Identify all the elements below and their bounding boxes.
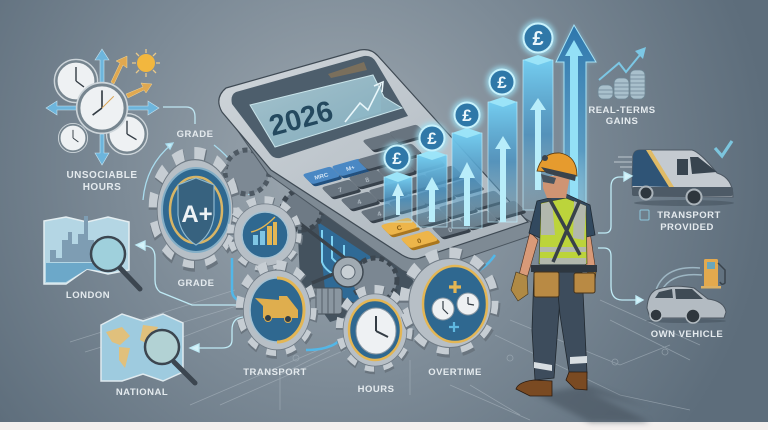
right leg — [556, 272, 587, 373]
label: real-terms gains: GAINS — [606, 116, 638, 127]
bar 4 with pound coin — [486, 66, 518, 222]
arms — [519, 232, 596, 278]
connector to london — [136, 241, 240, 305]
clock bottom left — [58, 123, 88, 153]
bar 3 with pound coin — [451, 99, 483, 228]
pulley — [333, 257, 363, 287]
gear: overtime — [406, 254, 493, 350]
van — [614, 150, 734, 206]
label: transport: TRANSPORT — [243, 367, 307, 378]
connector to van — [598, 172, 632, 233]
safety glasses — [541, 174, 556, 184]
calculator side — [219, 80, 531, 274]
map: national — [101, 314, 195, 383]
bar 2 with pound coin: £ — [427, 129, 437, 148]
connector arcs around grade gear — [143, 143, 249, 200]
key labels: 8 — [365, 177, 371, 184]
bar 4 with pound coin: £ — [497, 73, 507, 92]
clocks icon: unsociable hours — [46, 49, 160, 165]
key labels: 0 — [448, 227, 454, 234]
key labels: 4 — [357, 199, 363, 206]
reflective bands — [534, 356, 587, 371]
circuit lines — [70, 290, 700, 420]
label: transport provided: TRANSPORT — [657, 210, 721, 221]
check mark — [715, 141, 732, 156]
sun — [132, 49, 160, 77]
fuel pump — [656, 259, 725, 290]
gear: grade — [154, 155, 235, 263]
label: overtime: OVERTIME — [428, 367, 482, 378]
label: upper grade: GRADE — [177, 129, 213, 140]
label: own vehicle: OWN VEHICLE — [651, 329, 723, 340]
label: lower grade: GRADE — [178, 278, 214, 289]
vest reflective stripes — [540, 201, 586, 264]
label: real-terms gains: REAL-TERMS — [588, 105, 656, 116]
glowing pipes — [232, 255, 495, 350]
label: hours: HOURS — [358, 384, 394, 395]
key labels: M+ — [346, 165, 356, 173]
display year: 2026 — [266, 95, 337, 143]
bar 1 with pound coin — [381, 142, 413, 222]
lcd screen — [250, 75, 402, 147]
clock main — [77, 83, 127, 133]
bar 3 with pound coin: £ — [462, 106, 472, 125]
left leg — [532, 272, 562, 380]
key labels — [314, 165, 454, 245]
connector: clocks to grade — [163, 107, 195, 124]
worker — [511, 153, 597, 396]
label: transport provided: PROVIDED — [660, 222, 714, 233]
key labels: 0 — [417, 238, 423, 245]
key labels: 7 — [338, 187, 344, 194]
machinery behind gears — [225, 150, 414, 322]
label: unsociable hours: UNSOCIABLE — [66, 170, 138, 181]
hi-vis vest — [539, 198, 587, 264]
gear: hours — [341, 290, 408, 368]
magnifier — [145, 330, 195, 383]
gear: transport — [241, 266, 312, 352]
hard hat — [537, 153, 577, 181]
magnifier — [91, 237, 140, 289]
gloves — [511, 272, 596, 301]
key labels: 4 — [377, 211, 383, 218]
gear: grade: A+ — [181, 201, 213, 228]
big rising arrow — [556, 25, 596, 205]
calculator top — [219, 50, 528, 259]
harness straps — [549, 198, 580, 262]
neck and face — [543, 176, 570, 198]
shirt — [529, 194, 595, 238]
coins and trend icon — [598, 47, 646, 99]
orange arrows — [111, 56, 152, 98]
shaft — [310, 288, 342, 314]
key labels: 2 — [427, 216, 433, 223]
key labels: C — [396, 225, 403, 232]
upper toothed gear — [282, 190, 322, 230]
solar strip — [328, 62, 367, 78]
gear: chart — [232, 201, 298, 268]
lcd bezel — [232, 56, 408, 158]
connector to own vehicle — [598, 248, 643, 304]
bar 2 with pound coin — [416, 122, 448, 227]
boots — [516, 372, 587, 396]
label: national: NATIONAL — [116, 387, 168, 398]
key labels: MRC — [314, 172, 330, 182]
checkbox — [640, 210, 649, 220]
connector to national — [190, 317, 243, 352]
clock top left — [54, 59, 98, 103]
bar 5 with pound coin — [520, 20, 556, 210]
bar 1 with pound coin: £ — [392, 149, 402, 168]
belt and tool pouches — [531, 265, 597, 297]
bottom strip — [0, 422, 768, 430]
worker shadow — [535, 385, 650, 422]
drive belt — [298, 222, 362, 283]
map: london — [44, 216, 140, 289]
display trend line — [345, 82, 383, 122]
blue pipe housing — [296, 192, 414, 322]
label: unsociable hours: HOURS — [83, 182, 121, 193]
calculator — [219, 50, 531, 274]
direction arrows — [46, 49, 159, 165]
bar 5 with pound coin: £ — [532, 28, 544, 50]
small rear gear — [225, 150, 269, 194]
keypad — [302, 124, 527, 251]
label: london: LONDON — [66, 290, 110, 301]
rear toothed gear — [353, 258, 397, 302]
clock bottom right — [106, 113, 148, 155]
car — [646, 286, 726, 323]
